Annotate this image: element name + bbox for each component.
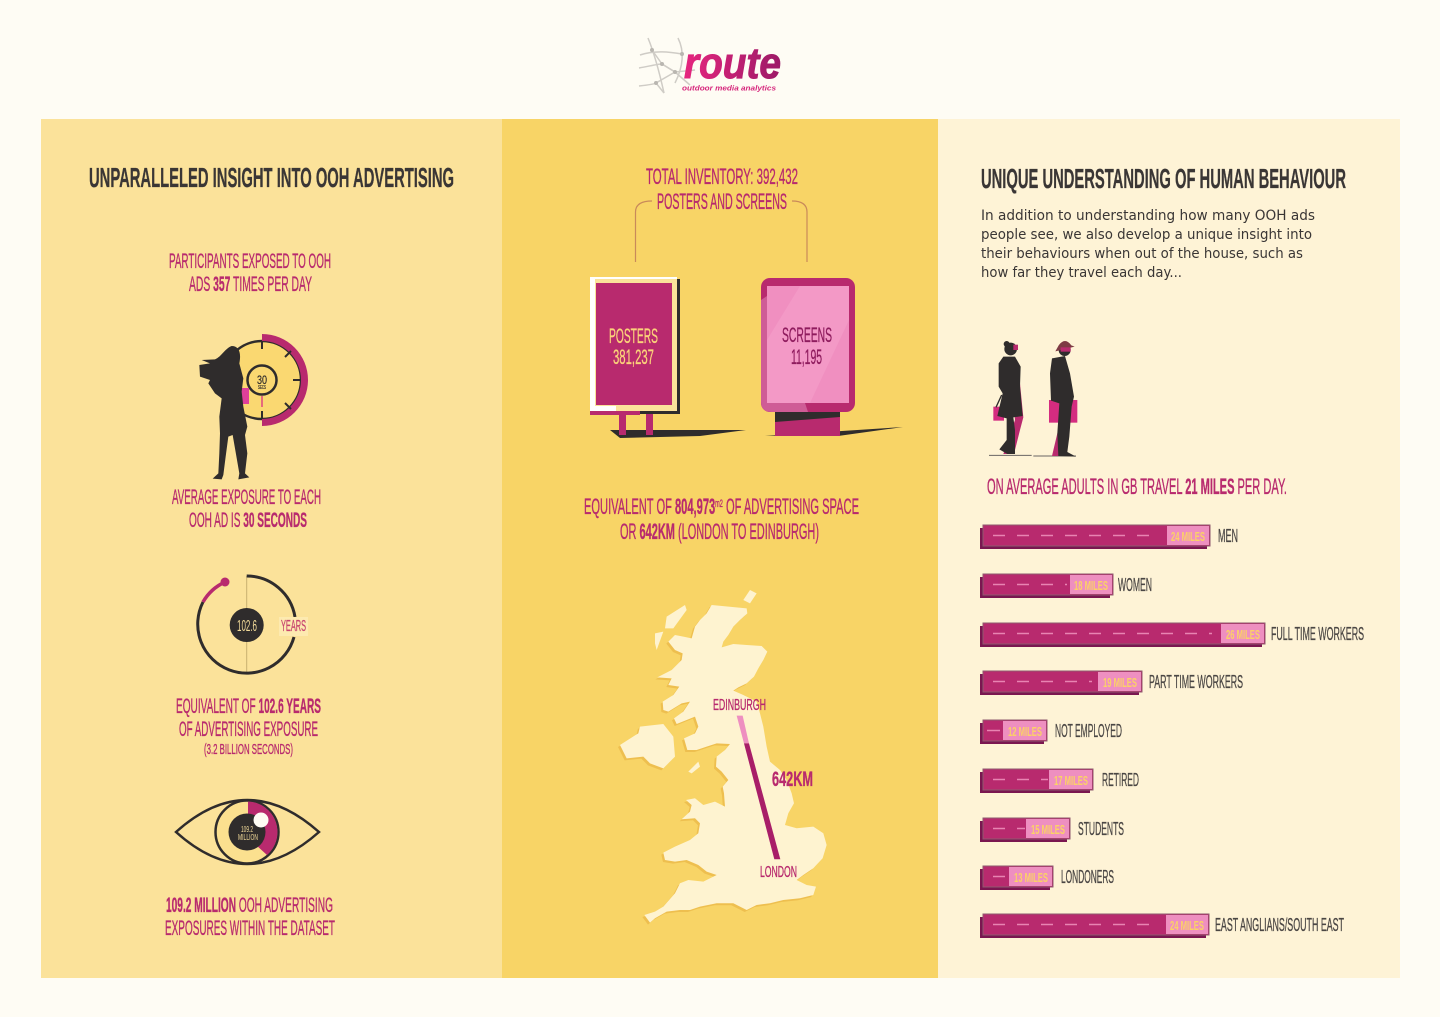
bar: londoners — [980, 866, 1114, 890]
icon: digital screen — [761, 278, 903, 436]
label: 642km: 642KM — [772, 768, 813, 791]
icon: eye: MILLION — [238, 833, 258, 842]
text: advertising exposure years — [176, 695, 321, 758]
heading: unparalleled insight: UNPARALLELED INSIGHT INTO OOH ADVERTISING — [89, 162, 454, 193]
panel: OOH advertising insight — [41, 119, 502, 978]
panel: OOH advertising insight: EXPOSURES WITHIN THE DATASET — [165, 917, 335, 940]
bar: men: MEN — [1218, 526, 1238, 546]
panel: inventory — [502, 119, 938, 978]
bar chart: miles travelled per group: LONDONERS — [1061, 867, 1114, 887]
icon: eye: 109.2 — [241, 825, 253, 834]
bar: full time workers — [980, 623, 1364, 647]
icon: digital screen: SCREENS — [782, 324, 832, 347]
bar: part time workers — [980, 671, 1243, 695]
bar: students: 15 MILES — [1031, 822, 1065, 837]
bar: women — [980, 574, 1152, 598]
text: exposures per day — [169, 250, 331, 296]
panel: human behaviour — [938, 119, 1400, 978]
text: average travel: ON AVERAGE ADULTS IN GB TRAVEL 21 MILES PER DAY. — [987, 474, 1287, 499]
text: advertising space: EQUIVALENT OF 804,973 — [584, 494, 758, 519]
panel: inventory: OF ADVERTISING SPACE — [723, 494, 859, 519]
text: introduction: their behaviours when out of the house, such as — [981, 246, 1303, 262]
panel: OOH advertising insight: YEARS — [281, 618, 306, 635]
panel: OOH advertising insight: OF ADVERTISING EXPOSURE — [179, 718, 318, 741]
heading: total inventory: POSTERS AND SCREENS — [657, 189, 787, 214]
icon: poster billboard: POSTERS — [609, 325, 658, 348]
panel: OOH advertising insight: PARTICIPANTS EXPOSED TO OOH — [169, 250, 331, 273]
label: Edinburgh: EDINBURGH — [713, 697, 766, 714]
bar: retired — [980, 769, 1139, 793]
bar chart: miles travelled per group: NOT EMPLOYED — [1055, 721, 1122, 741]
bar: not employed: 12 MILES — [1008, 724, 1042, 739]
heading: total inventory: TOTAL INVENTORY: 392,432 — [646, 164, 798, 189]
icon: digital screen: 11,195 — [791, 346, 822, 369]
text: introduction — [981, 208, 1315, 281]
icon: poster billboard — [590, 277, 746, 438]
text: introduction: people see, we also develop a unique insight into — [981, 227, 1312, 243]
icon: woman and 30 second clock: SECS — [258, 385, 266, 391]
text: advertising space: OR 642KM (LONDON TO EDINBURGH) — [620, 519, 819, 544]
icon: two walking people — [989, 341, 1077, 457]
text: average exposure: OOH AD IS 30 SECONDS — [189, 509, 307, 532]
bar: part time workers: 19 MILES — [1103, 675, 1137, 690]
bar: retired: 17 MILES — [1054, 773, 1088, 788]
text: average exposure — [172, 486, 321, 532]
text: exposures per day: ADS 357 TIMES PER DAY — [189, 273, 312, 296]
icon: woman and 30 second clock: 30 — [257, 373, 267, 387]
icon: eye — [176, 800, 319, 864]
bar chart: miles travelled per group — [980, 525, 1364, 938]
text: introduction: In addition to understanding how many OOH ads — [981, 208, 1315, 224]
bar: men: 24 MILES — [1171, 529, 1205, 544]
text: advertising space: m2 — [715, 498, 723, 510]
bar: east anglians / south east: 24 MILES — [1170, 918, 1204, 933]
bar: students — [980, 818, 1124, 842]
panel: OOH advertising insight: AVERAGE EXPOSURE TO EACH — [172, 486, 321, 509]
logo: route: outdoor media analytics — [682, 84, 776, 92]
bar: not employed — [980, 720, 1122, 744]
icon: 102.6 years dial: 102.6 — [237, 618, 257, 635]
bar chart: miles travelled per group: WOMEN — [1118, 575, 1152, 595]
logo: route — [639, 38, 781, 93]
text: 109.2 million exposures — [165, 894, 335, 940]
text: advertising exposure years: (3.2 BILLION SECONDS) — [204, 742, 293, 758]
bar chart: miles travelled per group: STUDENTS — [1078, 819, 1124, 839]
text: advertising exposure years: EQUIVALENT OF 102.6 YEARS — [176, 695, 321, 718]
bar: east anglians / south east — [980, 914, 1344, 938]
bar: full time workers: 26 MILES — [1226, 627, 1260, 642]
heading: total inventory — [646, 164, 798, 214]
bar chart: miles travelled per group: PART TIME WORKERS — [1149, 672, 1243, 692]
icon: 102.6 years dial — [198, 576, 308, 674]
map: United Kingdom — [618, 590, 827, 925]
bracket: posters and screens — [636, 201, 807, 262]
icon: poster billboard: 381,237 — [613, 346, 654, 369]
text: introduction: how far they travel each day... — [981, 265, 1182, 281]
text: 109.2 million exposures: 109.2 MILLION OOH ADVERTISING — [166, 894, 333, 917]
bar: men — [980, 525, 1238, 549]
bar: londoners: 13 MILES — [1014, 870, 1048, 885]
text: advertising space — [584, 494, 859, 544]
icon: woman and 30 second clock — [199, 334, 308, 479]
logo: route: route — [684, 39, 781, 88]
label: London: LONDON — [760, 864, 797, 881]
bar chart: miles travelled per group: RETIRED — [1102, 770, 1139, 790]
bar: women: 18 MILES — [1074, 578, 1108, 593]
